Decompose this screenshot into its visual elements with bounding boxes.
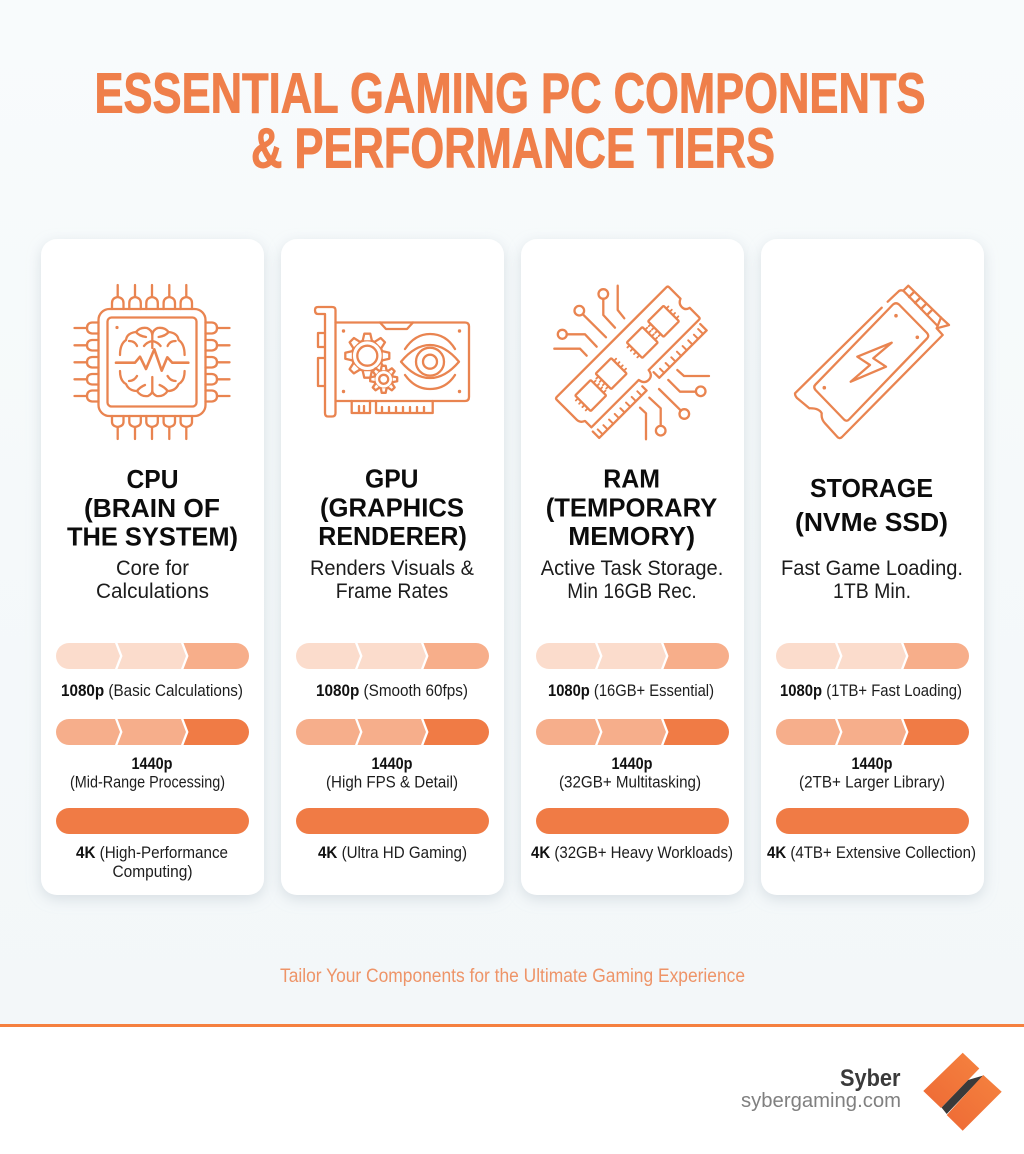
tier bar: GPU 1080p: [296, 643, 489, 669]
footer band: [0, 1024, 1024, 1154]
tier label: CPU 1440p: 1440p: [132, 755, 172, 773]
tier label: GPU 1440p: [326, 755, 458, 792]
title: & PERFORMANCE TIERS: [251, 116, 775, 180]
description: RAM: Min 16GB Rec.: [567, 580, 697, 603]
tier label: CPU 1440p: (Mid-Range Processing): [70, 774, 225, 792]
tier label: Storage 4K: 4K (4TB+ Extensive Collection): [767, 844, 976, 862]
description: Storage: 1TB Min.: [833, 580, 911, 603]
eye: [401, 345, 459, 378]
tier label: GPU 1080p: 1080p (Smooth 60fps): [316, 682, 468, 700]
brand name: sybergaming.com: [741, 1090, 901, 1112]
tier label: Storage 1440p: 1440p: [852, 755, 892, 773]
heading: Storage: (NVMe SSD): [795, 507, 948, 537]
panel: Storage: [761, 239, 984, 895]
tier bar: RAM 1440p: [536, 719, 729, 745]
heading: CPU: (BRAIN OF: [84, 493, 220, 523]
circuit traces: [554, 349, 587, 356]
tier bar: RAM 1080p: [536, 643, 729, 669]
description: GPU: Frame Rates: [336, 580, 448, 603]
description: CPU: Calculations: [96, 580, 209, 603]
tagline: Tailor Your Components for the Ultimate Gaming Experience: [280, 966, 745, 987]
tier bar: GPU 1440p: [296, 719, 489, 745]
module body: [555, 286, 705, 436]
heading: RAM: [546, 464, 717, 551]
tier bar: CPU 1080p: [56, 643, 249, 669]
heading: CPU: THE SYSTEM): [67, 522, 238, 552]
description: Storage: Fast Game Loading.: [781, 557, 963, 580]
heading: RAM: (TEMPORARY: [546, 493, 717, 523]
description: GPU: [310, 557, 474, 603]
brain outline: [120, 328, 152, 355]
panel: GPU: [281, 239, 504, 895]
tier label: RAM 4K: 4K (32GB+ Heavy Workloads): [531, 844, 733, 862]
icon: CPU with brain: [74, 285, 230, 439]
memory chips: [573, 378, 608, 413]
heading: GPU: [318, 464, 467, 551]
brand name: Syber: [840, 1065, 900, 1092]
tier bar: RAM 4K: [536, 808, 729, 834]
tier bar: Storage 1440p: [776, 719, 969, 745]
tier bar: Storage 1080p: [776, 643, 969, 669]
tier label: RAM 1440p: (32GB+ Multitasking): [559, 774, 701, 792]
title: [94, 61, 926, 180]
tier label: Storage 1440p: (2TB+ Larger Library): [799, 774, 945, 792]
description: Storage: [781, 557, 963, 603]
icon: NVMe SSD: [795, 286, 949, 438]
brand name: [741, 1065, 901, 1112]
panel: CPU: [41, 239, 264, 895]
tier label: GPU 4K: 4K (Ultra HD Gaming): [318, 844, 467, 862]
tier label: CPU 4K: 4K (High-Performance: [76, 844, 228, 862]
heading: CPU: CPU: [126, 464, 178, 494]
heading: GPU: GPU: [365, 464, 418, 494]
tier label: CPU 4K: [76, 844, 228, 881]
heading: Storage: [795, 473, 948, 537]
tier label: Storage 1080p: 1080p (1TB+ Fast Loading): [780, 682, 962, 700]
description: CPU: [96, 557, 209, 603]
heading: GPU: RENDERER): [318, 521, 467, 551]
tier label: CPU 1440p: [70, 755, 225, 792]
tier label: GPU 1440p: (High FPS & Detail): [326, 774, 458, 792]
panel: RAM: [521, 239, 744, 895]
icon: graphics card: [315, 307, 469, 416]
icon: brand logo: [923, 1053, 1002, 1131]
heading: RAM: MEMORY): [568, 521, 695, 551]
tier label: CPU 4K: Computing): [112, 863, 192, 881]
tier label: RAM 1440p: 1440p: [612, 755, 652, 773]
tier bar: GPU 4K: [296, 808, 489, 834]
gears: [345, 334, 389, 378]
heading: CPU: [67, 464, 238, 552]
tier bar: CPU 1440p: [56, 719, 249, 745]
tier bar: CPU 4K: [56, 808, 249, 834]
tier label: RAM 1440p: [559, 755, 701, 792]
heading: Storage: STORAGE: [810, 473, 933, 503]
icon: RAM module: [554, 286, 709, 440]
tier bar: Storage 4K: [776, 808, 969, 834]
tier label: CPU 1080p: 1080p (Basic Calculations): [61, 682, 243, 700]
description: RAM: [541, 557, 723, 603]
tier label: RAM 1080p: 1080p (16GB+ Essential): [548, 682, 714, 700]
description: GPU: Renders Visuals &: [310, 557, 474, 580]
tier label: Storage 1440p: [799, 755, 945, 792]
pin strip: [593, 324, 707, 438]
description: RAM: Active Task Storage.: [541, 557, 723, 580]
description: CPU: Core for: [116, 557, 189, 580]
tier label: GPU 1440p: 1440p: [372, 755, 412, 773]
heading: GPU: (GRAPHICS: [320, 493, 464, 523]
heading: RAM: RAM: [603, 464, 660, 494]
